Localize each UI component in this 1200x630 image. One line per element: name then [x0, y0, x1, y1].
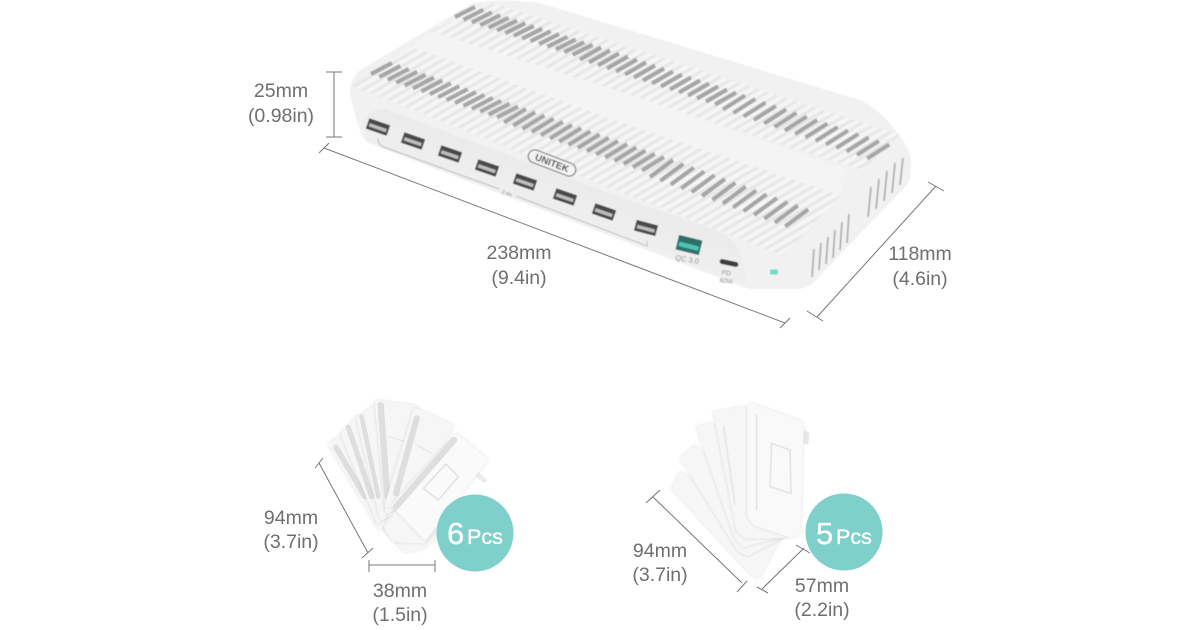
dimension: width [807, 182, 952, 321]
dimension: clip width right: (2.2in) [794, 599, 850, 621]
rib band: lower [352, 47, 843, 256]
rib band: upper [430, 2, 900, 170]
LED [770, 270, 778, 274]
clip width label: 38mm [373, 580, 427, 602]
length label: 238mm [486, 242, 552, 264]
clip length label: 94mm [633, 540, 687, 562]
card 4 [715, 408, 787, 537]
card 4 [377, 402, 425, 512]
cable clips: 6 pcs [331, 402, 488, 550]
dimension: clip length right: (3.7in) [632, 564, 688, 586]
charger body [350, 0, 911, 289]
width label: 118mm [888, 243, 952, 265]
dimension: clip length left [263, 458, 373, 558]
dimension: clip width left: (1.5in) [372, 604, 428, 626]
card 2 [343, 418, 390, 522]
vent slots: upper row [455, 7, 889, 158]
UNITEK logo [526, 148, 578, 178]
clip length label: 94mm [264, 507, 318, 529]
QC port [676, 235, 702, 255]
card 5 tab [803, 430, 809, 445]
5 pcs badge: 5 [816, 516, 833, 551]
stacked card bottom 2 [377, 500, 433, 542]
card 1 [674, 474, 778, 576]
port bracket [378, 138, 647, 246]
clip width label: 57mm [795, 575, 849, 597]
card 5 [387, 410, 452, 510]
6 pcs badge: 6 [447, 516, 464, 551]
dimension: clip length right [632, 490, 747, 592]
smooth centre strip [413, 32, 847, 195]
dimension: width: (4.6in) [892, 268, 948, 290]
card 3 [699, 425, 787, 545]
60W label: 60W [719, 277, 734, 286]
QC label: QC 3.0 [675, 253, 700, 266]
vent slots: lower row [371, 63, 808, 226]
PD label: PD [721, 269, 731, 278]
dimension: length [319, 143, 790, 328]
card 6 tab [475, 472, 488, 483]
UNITEK logo: UNITEK [533, 152, 570, 175]
dimension: clip length left: (3.7in) [263, 531, 319, 553]
dimension: length: (9.4in) [491, 267, 547, 289]
dimension: clip width left [369, 560, 435, 626]
card 6 [394, 435, 485, 538]
5 pcs badge: Pcs [836, 525, 872, 549]
dimension: clip width right [757, 545, 850, 621]
side vents [812, 158, 903, 277]
6 pcs badge [436, 494, 514, 572]
6 pcs badge: Pcs [467, 525, 503, 549]
dimension: height [248, 72, 342, 137]
cable clips: 5 pcs [674, 405, 809, 576]
card 3 [358, 407, 392, 518]
front panel [363, 109, 748, 289]
stacked card bottom 1 [378, 503, 435, 550]
bracket label: 2.4A [501, 189, 513, 199]
card 2 [683, 447, 784, 554]
usb ports [366, 118, 658, 236]
5 pcs badge [806, 494, 882, 570]
card 1 [331, 433, 387, 528]
USB-C port [719, 259, 739, 267]
charger [350, 0, 911, 289]
height label: 25mm [254, 80, 308, 102]
card 5 [749, 405, 802, 536]
dimension: height: (0.98in) [248, 105, 314, 127]
